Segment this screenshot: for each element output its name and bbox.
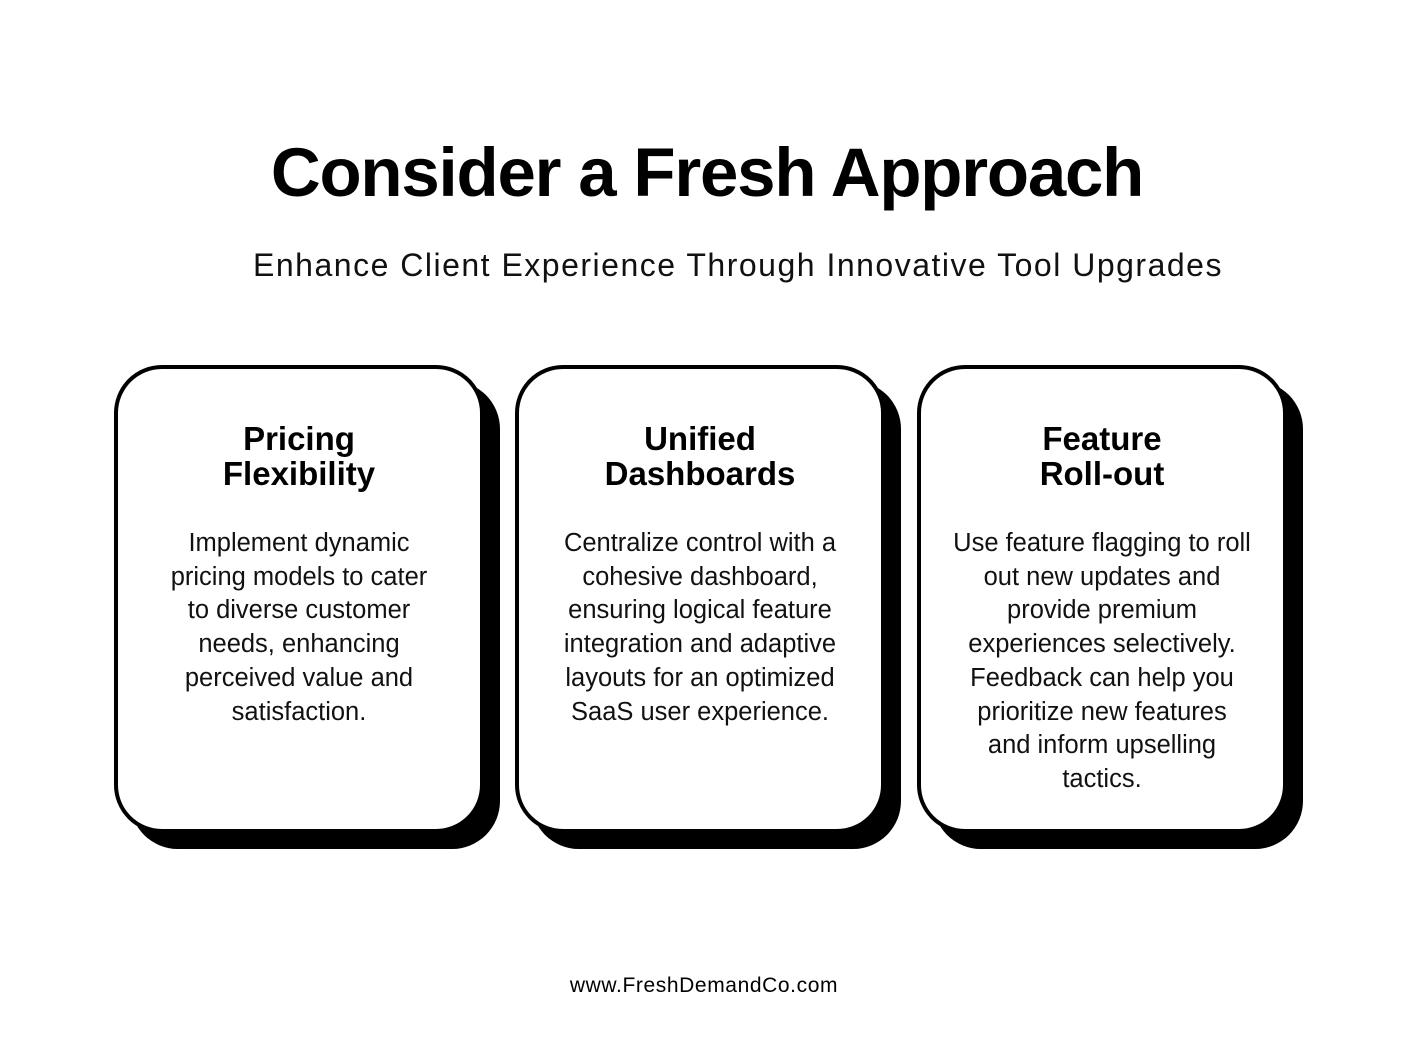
text block [953,529,1251,793]
text block: perceived value and [185,664,413,692]
footer url: www.FreshDemandCo.com [570,974,838,997]
heading [1040,420,1164,492]
text block: Implement dynamic [188,529,410,557]
heading: Pricing [243,420,355,457]
text block: to diverse customer [188,596,410,624]
heading: Dashboards [605,455,795,492]
heading: Roll-out [1040,455,1164,492]
text block: experiences selectively. [968,630,1236,658]
text block: Use feature flagging to roll [953,529,1251,557]
text block: needs, enhancing [198,630,400,658]
heading: Unified [644,420,756,457]
text block [171,529,427,726]
text block: Centralize control with a [564,529,836,557]
text block: Feedback can help you [970,664,1234,692]
heading: Feature [1042,420,1162,457]
title: Consider a Fresh Approach [271,134,1143,211]
heading [223,420,375,492]
panel: feature roll-out [917,365,1303,849]
text block: prioritize new features [977,698,1227,726]
panel: unified dashboards [515,365,901,849]
text block: layouts for an optimized [565,664,835,692]
text block: provide premium [1007,596,1197,624]
heading [605,420,795,492]
text block: SaaS user experience. [571,698,829,726]
text block: pricing models to cater [171,563,427,591]
text block [564,529,836,726]
subtitle: Enhance Client Experience Through Innovative Tool Upgrades [253,247,1223,283]
text block: integration and adaptive [564,630,836,658]
panel: pricing flexibility [114,365,500,849]
text block: cohesive dashboard, [582,563,818,591]
heading: Flexibility [223,455,375,492]
text block: and inform upselling [988,731,1216,759]
text block: ensuring logical feature [568,596,832,624]
text block: out new updates and [984,563,1220,591]
text block: satisfaction. [232,698,366,726]
text block: tactics. [1062,765,1142,793]
